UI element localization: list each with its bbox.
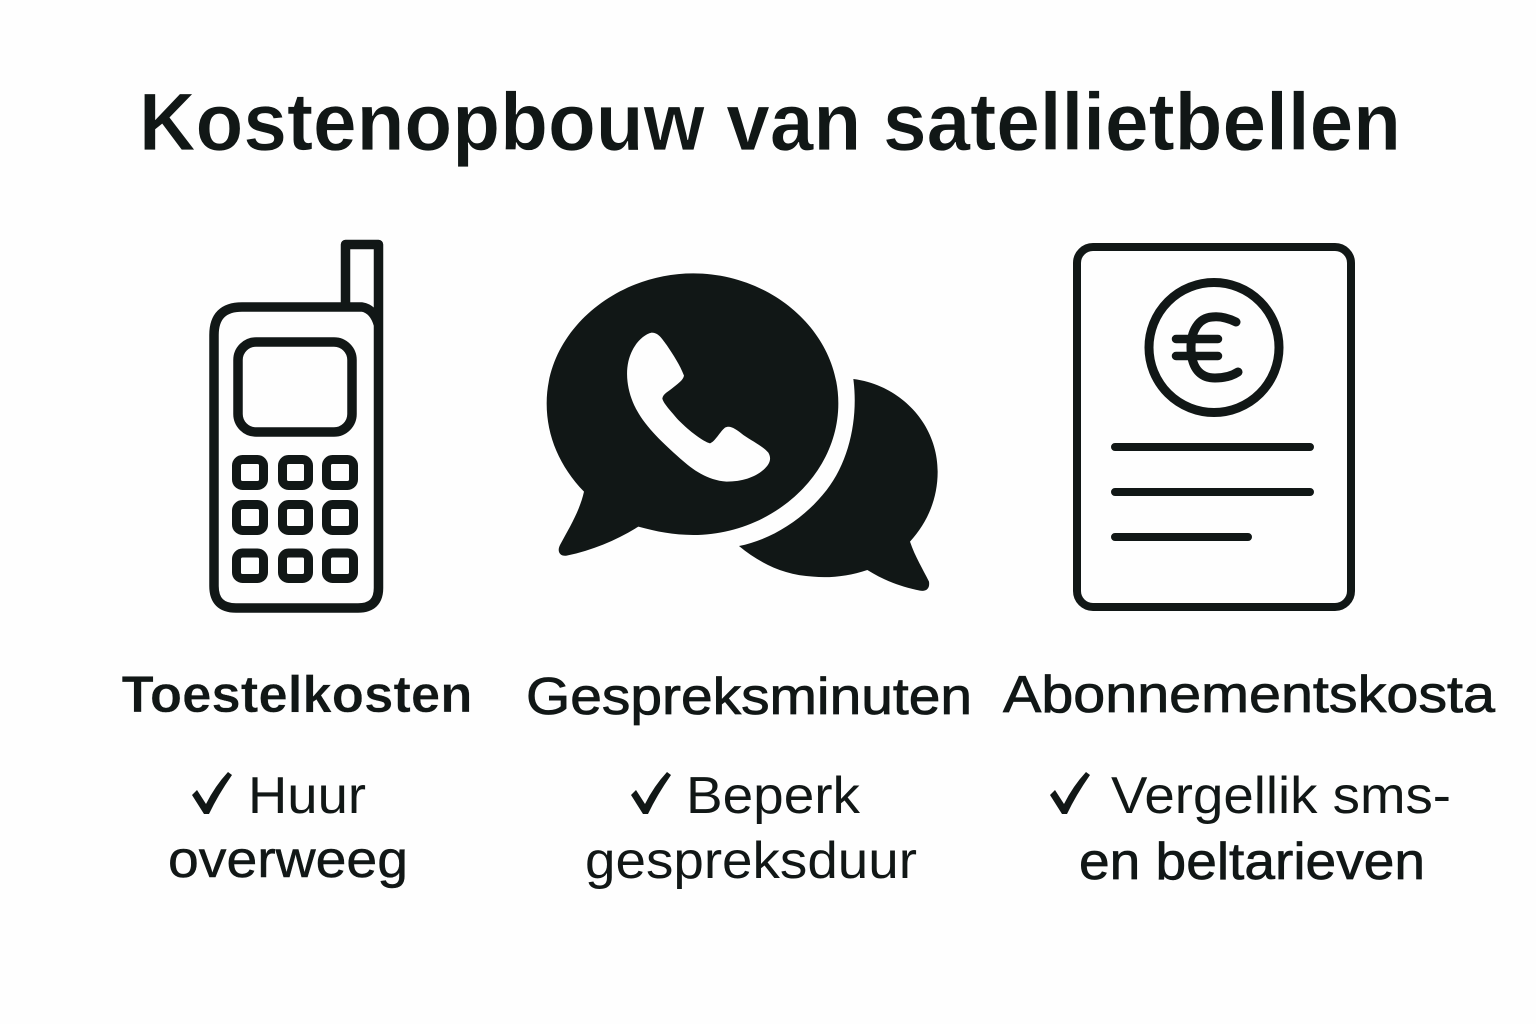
icon: speech bubbles with handset bbox=[547, 273, 938, 591]
title: Kostenopbouw van satellietbellen bbox=[139, 77, 1401, 168]
icon: invoice with euro bbox=[1077, 247, 1351, 607]
tip: Huur overweeg: Huur bbox=[248, 767, 366, 825]
heading: Abonnementskosta: Abonnementskosta bbox=[1003, 666, 1495, 724]
tip: Huur overweeg: overweeg bbox=[168, 831, 408, 889]
tip: Beperk gespreksduur: Beperk bbox=[686, 767, 861, 825]
tip: Vergellik sms- en beltarieven: en beltarieven bbox=[1079, 833, 1425, 891]
tip: Vergellik sms- en beltarieven: Vergellik sms- bbox=[1111, 767, 1451, 825]
tip: Vergellik sms- en beltarieven bbox=[1050, 767, 1451, 891]
tip: Beperk gespreksduur bbox=[585, 767, 917, 890]
heading: Toestelkosten: Toestelkosten bbox=[122, 666, 472, 724]
tip: Beperk gespreksduur: gespreksduur bbox=[585, 832, 917, 890]
tip: Huur overweeg bbox=[168, 767, 408, 889]
icon: satellite phone bbox=[214, 244, 378, 608]
heading: Gespreksminuten: Gespreksminuten bbox=[526, 668, 972, 726]
